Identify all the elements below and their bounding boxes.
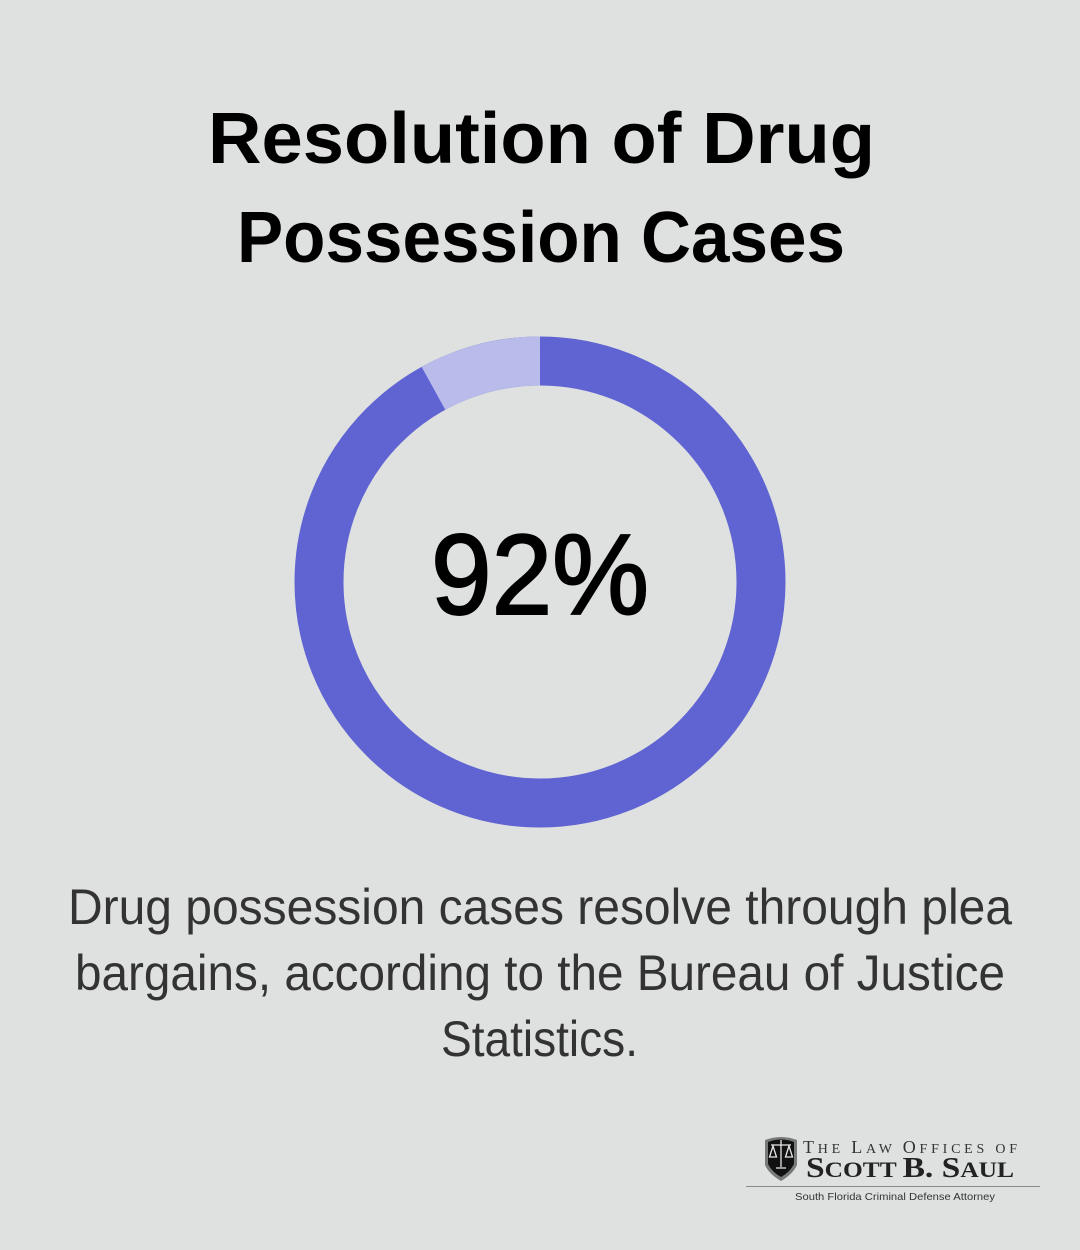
donut chart: 92% (319, 361, 761, 803)
description text: Statistics. (441, 1011, 638, 1067)
icon: shield with scales (765, 1137, 797, 1181)
description text (68, 879, 1012, 1067)
logo first line: T HE L AW O FFICES OF (803, 1137, 1017, 1157)
description text: bargains, according to the Bureau of Justice (75, 945, 1005, 1001)
logo second line: SCOTT B. S AUL (806, 1152, 1014, 1184)
logo: The Law Offices of Scott B. Saul (746, 1137, 1040, 1203)
logo divider (746, 1186, 1040, 1187)
title: Possession Cases (237, 198, 845, 278)
title (208, 99, 875, 278)
title: Resolution of Drug (208, 99, 875, 179)
donut value: 92% (431, 512, 649, 639)
description text: Drug possession cases resolve through plea (68, 879, 1012, 935)
logo tagline: South Florida Criminal Defense Attorney (795, 1191, 996, 1203)
